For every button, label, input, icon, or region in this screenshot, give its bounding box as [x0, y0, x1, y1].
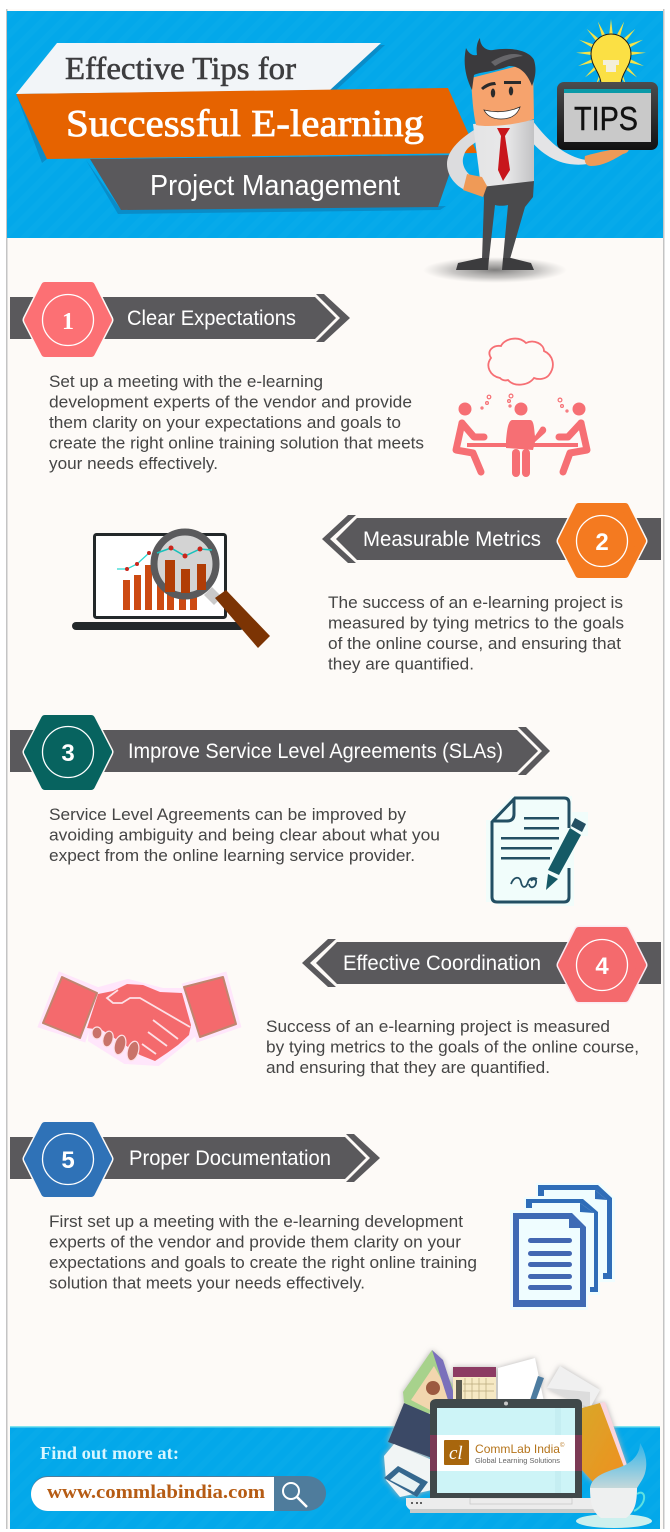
heading bar: proper documentation: Proper Documentation: [129, 1146, 331, 1170]
search box with url: www.commlabindia.com: [47, 1483, 266, 1503]
number badge 4: [562, 931, 642, 998]
logo band: Global Learning Solutions: [475, 1456, 560, 1465]
desk items behind laptop: [384, 1350, 627, 1497]
body text 3: [49, 806, 440, 865]
body text 5: solution that meets your needs effectively.: [49, 1274, 365, 1292]
envelope: [547, 1366, 600, 1408]
shadow: [423, 257, 567, 283]
body text 1: development experts of the vendor and provide: [49, 394, 412, 412]
tie: [497, 128, 510, 181]
hand on hip: [463, 174, 487, 197]
body text 4: by tying metrics to the goals of the online course,: [266, 1038, 639, 1056]
heading bar: clear expectations: Clear Expectations: [127, 306, 296, 330]
clasped hands: [87, 984, 191, 1061]
notebook: [388, 1403, 432, 1458]
icon: document stack: [510, 1183, 615, 1310]
number badge 1: [28, 286, 108, 353]
body text 1: Set up a meeting with the e-learning: [49, 373, 323, 391]
tip 4: [40, 931, 661, 1077]
book: [582, 1403, 626, 1482]
body text 3: Service Level Agreements can be improved by: [49, 806, 407, 824]
title banner: line one: Effective Tips for: [65, 50, 296, 86]
icon: meeting: [456, 339, 587, 477]
tip 1: [10, 286, 587, 477]
heading bar: clear expectations: [10, 294, 350, 342]
number badge 2: [562, 507, 642, 574]
heading bar: proper documentation: [10, 1134, 380, 1182]
footer panel: [10, 1350, 660, 1529]
icon: handshake: [40, 974, 239, 1064]
body text 5: First set up a meeting with the e-learning development: [49, 1213, 463, 1231]
shirt: [473, 120, 534, 187]
number badge 1: 1: [62, 309, 74, 335]
number badge 5: 5: [61, 1147, 75, 1174]
shoes: [456, 258, 534, 270]
tip 2: [72, 507, 661, 674]
body text 2: of the online course, and ensuring that: [328, 635, 621, 653]
paper: [498, 1358, 544, 1402]
title banner: line two: Successful E-learning: [66, 103, 424, 145]
heading bar: effective coordination: Effective Coordination: [343, 951, 541, 975]
heading bar: service level agreements: Improve Service Level Agreements (SLAs): [128, 739, 503, 763]
body text 4: [266, 1018, 639, 1077]
heading bar: measurable metrics: [322, 515, 661, 563]
pencil: [530, 1376, 544, 1400]
icon: signed document: [486, 796, 588, 906]
tablet with tips label: [557, 82, 658, 150]
face: [471, 62, 534, 126]
map: [403, 1350, 458, 1425]
heading bar: service level agreements: [10, 727, 550, 775]
cuffs: [43, 977, 97, 1038]
header panel: [7, 11, 663, 283]
title banner: line two: [16, 88, 477, 163]
logo band: [437, 1435, 575, 1471]
body text 2: they are quantified.: [328, 656, 474, 674]
body text 2: measured by tying metrics to the goals: [328, 614, 624, 632]
title banner: line three: [86, 155, 456, 214]
logo band: cl: [449, 1443, 463, 1464]
body text 4: Success of an e-learning project is measured: [266, 1018, 610, 1036]
letters: [384, 1444, 432, 1497]
laptop with logo: [406, 1399, 600, 1513]
eyes and brows: [481, 81, 521, 98]
character: businessman: [423, 38, 629, 283]
tip 3: [10, 719, 588, 906]
body text 1: your needs effectively.: [49, 455, 218, 473]
search box with url: [31, 1476, 326, 1511]
smile: [484, 107, 520, 119]
find out more label: Find out more at:: [40, 1443, 179, 1463]
body text 3: expect from the online learning service provider.: [49, 847, 415, 865]
halo: [40, 974, 239, 1064]
heading bar: effective coordination: [302, 939, 661, 987]
body text 1: them clarity on your expectations and goals to: [49, 414, 401, 432]
number badge 3: [28, 719, 108, 786]
logo band: CommLab India: [475, 1442, 560, 1456]
number badge 2: 2: [595, 529, 609, 556]
tip 5: [10, 1126, 615, 1310]
body text 2: [328, 594, 624, 674]
heading bar: measurable metrics: Measurable Metrics: [363, 527, 541, 551]
body text 1: [49, 373, 424, 473]
icon: light bulb: [576, 19, 646, 87]
logo band: ©: [560, 1442, 565, 1449]
body text 3: avoiding ambiguity and being clear about what you: [49, 826, 440, 844]
coffee cup: [576, 1443, 652, 1528]
icon: laptop chart with magnifier: [72, 532, 270, 648]
number badge 4: 4: [595, 953, 609, 980]
hair: [465, 38, 535, 90]
legs and trousers: [482, 181, 534, 259]
number badge 3: 3: [61, 740, 75, 767]
body text 5: expectations and goals to create the right online training: [49, 1254, 477, 1272]
body text 2: The success of an e-learning project is: [328, 594, 623, 612]
right arm holding tablet: [530, 120, 588, 165]
number badge 5: [28, 1126, 108, 1193]
title banner: line one: [16, 43, 385, 97]
calendar: [453, 1367, 496, 1403]
body text 5: [49, 1213, 477, 1292]
hand under tablet: [585, 147, 629, 166]
body text 4: and ensuring that they are quantified.: [266, 1059, 550, 1077]
title banner: line three: Project Management: [150, 170, 400, 202]
body text 1: create the right online training solution that meets: [49, 434, 424, 452]
left arm: [447, 130, 476, 190]
body text 5: experts of the vendor and provide them clarity on your: [49, 1234, 462, 1252]
tablet with tips label: TIPS: [574, 100, 638, 137]
